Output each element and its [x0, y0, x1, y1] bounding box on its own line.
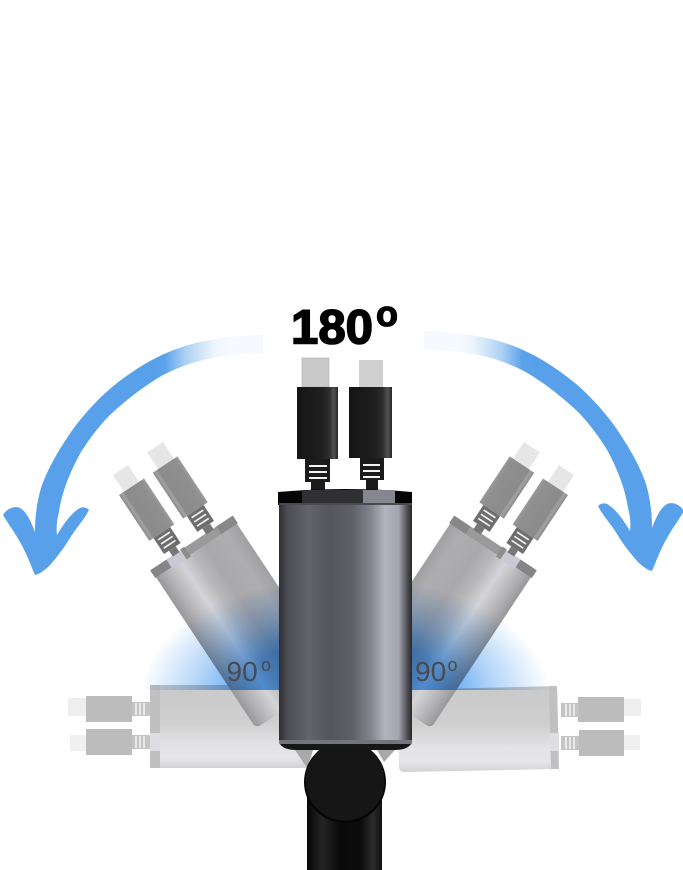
- blue glow behind main body: [146, 589, 544, 690]
- arrow: left rotation: [3, 335, 263, 575]
- label: left 90 degrees: 90: [226, 656, 258, 687]
- main charger: body: [278, 489, 412, 750]
- stand: pole: [307, 790, 382, 870]
- tilted charger: left position: [95, 432, 338, 729]
- wedge details under main body: [295, 750, 395, 768]
- label: left 90 degrees: o: [261, 655, 271, 675]
- main charger: right plug: [349, 360, 392, 490]
- main charger: left plug: [297, 358, 338, 491]
- horizontal charger: right position: [398, 686, 641, 772]
- horizontal charger: left position: [68, 685, 312, 768]
- title: 180 degrees: [291, 293, 398, 354]
- title: 180 degrees: o: [376, 293, 398, 334]
- label: right 90 degrees: o: [448, 655, 458, 675]
- arrow: right rotation: [424, 331, 683, 571]
- stand: pivot knob: [304, 741, 386, 823]
- title: 180 degrees: 180: [291, 302, 373, 354]
- tilted charger: right position: [349, 432, 592, 729]
- label: right 90 degrees: 90: [415, 656, 446, 687]
